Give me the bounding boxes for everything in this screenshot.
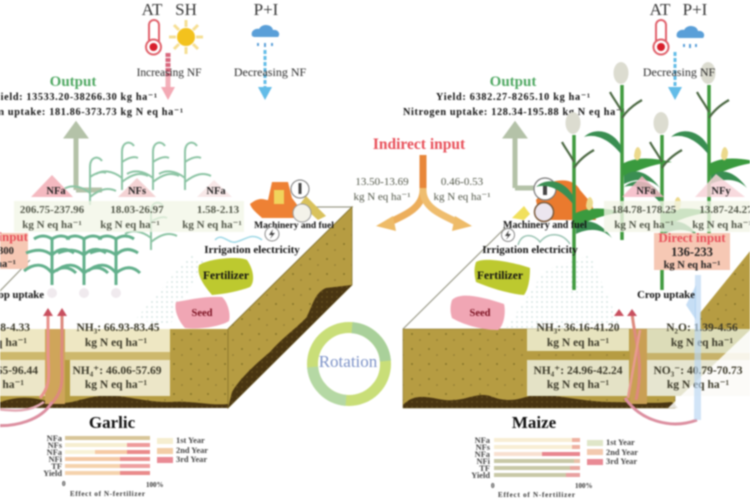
icon: gauge circle	[534, 202, 554, 222]
rotation symbol	[312, 328, 386, 400]
legend: 1st Year	[176, 436, 205, 445]
text: right irrigation: Irrigation electricity	[482, 244, 578, 256]
heading: output: Output	[490, 74, 536, 90]
text: NH3: NH₃: 36.16-41.20	[537, 322, 620, 334]
text: irrigation: Irrigation electricity	[204, 244, 300, 256]
icon: lightning	[265, 227, 279, 241]
icon: lightning	[502, 228, 514, 242]
row labels: TF	[479, 464, 490, 473]
cut-away	[668, 330, 750, 408]
icon: thermometer	[146, 20, 161, 54]
soil: front face	[403, 329, 675, 408]
legend: 2nd Year	[606, 448, 638, 457]
text: N2O: N₂O: 1.39-4.56	[666, 322, 738, 334]
value: NFa: 206.75-237.96	[20, 204, 85, 216]
value: NFa2: 1.58-2.13	[197, 204, 240, 216]
icon: sun	[169, 20, 203, 54]
panel: right direct input: 136-233	[671, 245, 713, 259]
emission panels	[527, 329, 750, 408]
text: increasing NF: Increasing NF	[137, 67, 201, 79]
panel: NH3	[65, 329, 170, 352]
label: AT: AT	[142, 0, 163, 19]
arrow: output	[507, 125, 538, 188]
soil: side face	[700, 245, 750, 372]
maize plants	[536, 62, 750, 290]
triangle: NFa2	[197, 180, 232, 197]
panel: right direct input	[654, 230, 730, 271]
wave	[518, 235, 570, 245]
text: NH3 unit: kg N eq ha⁻¹	[85, 337, 147, 349]
panel: NH4	[70, 360, 170, 396]
left gas emissions	[14, 175, 244, 232]
text: right unit: kg N eq ha⁻¹	[433, 191, 491, 203]
panel: N2O	[647, 329, 750, 353]
blob: seed	[175, 297, 230, 329]
unit: NFa: kg N eq ha⁻¹	[614, 219, 674, 231]
label: NFa: NFa	[46, 186, 66, 197]
heading: garlic: Garlic	[89, 413, 136, 432]
text: machinery: Machinery and fuel	[254, 221, 334, 231]
field top surface edge	[403, 228, 505, 329]
icon: thermo circle	[291, 180, 309, 198]
soil: side face	[228, 207, 352, 408]
icon: rain cloud	[252, 25, 279, 47]
blob: fertilizer	[474, 260, 530, 295]
right gas emissions	[604, 174, 750, 232]
blue flow band	[694, 275, 701, 420]
indirect input	[353, 136, 491, 231]
blob: seed: Seed	[192, 308, 213, 319]
strip	[647, 353, 750, 360]
text: NH4: NH₄⁺: 46.06-57.69	[72, 365, 162, 377]
right output	[403, 74, 625, 188]
unit: NFa2: kg N eq ha⁻¹	[182, 219, 242, 231]
value: NFs: 18.03-26.97	[110, 204, 164, 216]
row labels: NFi	[48, 455, 63, 464]
ring	[312, 328, 386, 400]
legend: 2nd Year	[176, 446, 208, 455]
arrow: increasing	[161, 53, 175, 100]
strip	[0, 352, 170, 360]
icon: thermometer	[654, 20, 668, 54]
column	[45, 329, 65, 404]
row labels: NFa	[47, 448, 63, 457]
axis	[62, 480, 164, 498]
row labels: NFa	[47, 434, 63, 443]
label: P+I: P+I	[254, 0, 279, 19]
row labels: TF	[51, 462, 62, 471]
row labels: NFa	[475, 436, 491, 445]
unit: NFy: kg N eq ha⁻¹	[692, 219, 750, 231]
axis: 100%	[575, 482, 592, 490]
label: NFa2: NFa	[206, 186, 226, 197]
arrows: soil emissions	[0, 308, 67, 426]
right field block	[403, 228, 750, 424]
emission panels	[0, 329, 170, 404]
field top surface	[0, 207, 352, 329]
icon: tractor	[512, 180, 596, 220]
text: NH4 unit: kg N eq ha⁻¹	[547, 379, 609, 391]
panel: N2O	[0, 329, 45, 352]
garlic plants: front row	[24, 203, 177, 298]
icon: rain cloud	[677, 26, 704, 48]
axis: 0	[62, 480, 66, 488]
text: yield: Yield: 6382.27-8265.10 kg ha⁻¹	[436, 92, 590, 103]
text: NO3: NO₃⁻: 40.79-70.73	[653, 365, 743, 377]
garlic plants: back row	[64, 143, 211, 205]
row labels: Yield	[43, 469, 62, 478]
value: NFa: 184.78-178.25	[612, 204, 677, 216]
legend: 3rd Year	[606, 457, 637, 466]
row labels	[471, 436, 491, 480]
axis: Effect of N-fertilizer	[498, 491, 575, 499]
text: NH3 unit: kg N eq ha⁻¹	[547, 337, 609, 349]
triangle: NFs	[118, 178, 156, 197]
unit: NFs: kg N eq ha⁻¹	[100, 219, 160, 231]
heading: output: Output	[50, 74, 96, 90]
label: SH: SH	[175, 0, 197, 19]
column	[630, 329, 647, 404]
blob: seed	[450, 296, 505, 330]
text: NH3: NH₃: 66.93-83.45	[77, 322, 160, 334]
label: P+I: P+I	[683, 0, 708, 19]
text: left unit: kg N eq ha⁻¹	[353, 191, 411, 203]
heading: maize: Maize	[512, 413, 557, 432]
text: decreasing NF: Decreasing NF	[234, 65, 306, 79]
row labels: NFa	[475, 450, 491, 459]
legend: 1st Year	[606, 438, 635, 447]
legend: 3rd Year	[176, 455, 207, 464]
heading: Indirect input	[373, 136, 466, 153]
soil: front face	[0, 329, 228, 408]
panel: right direct input: kg N eq ha⁻¹	[664, 260, 720, 271]
axis	[491, 482, 592, 499]
panel: NH4	[527, 360, 629, 396]
axis: 100%	[146, 481, 164, 489]
text: N2O unit: kg N eq ha⁻¹	[671, 337, 733, 349]
panel: right direct input: Direct input	[658, 230, 726, 245]
icon: thermo circle	[534, 178, 556, 200]
stipple: irrigation zone	[135, 255, 205, 325]
text: NH4: NH₄⁺: 24.96-42.24	[533, 365, 623, 377]
wave	[215, 237, 262, 242]
row labels: NFs	[476, 443, 491, 452]
panel: NO3	[0, 360, 45, 396]
legend	[157, 436, 208, 464]
blob: fertilizer: Fertilizer	[203, 270, 249, 282]
soil: dark layer front	[0, 396, 228, 408]
left machinery	[175, 180, 334, 329]
blob: fertilizer: Fertilizer	[477, 270, 523, 282]
label: NFs: NFs	[128, 186, 146, 197]
bars	[494, 438, 580, 477]
triangle: NFy	[695, 174, 745, 197]
arrow: output	[68, 125, 102, 190]
text: left value: 13.50-13.69	[355, 176, 409, 188]
label: AT: AT	[650, 0, 671, 19]
text: NH4 unit: kg N eq ha⁻¹	[85, 379, 147, 391]
text: NO3 unit: kg N eq ha⁻¹	[667, 379, 729, 391]
arrows: soil emissions	[614, 309, 697, 424]
blob: fertilizer	[198, 258, 253, 295]
axis: Effect of N-fertilizer	[70, 490, 145, 498]
chart: maize N-fertilizer effect	[471, 436, 638, 499]
chart: garlic N-fertilizer effect	[43, 434, 208, 498]
row labels	[43, 434, 63, 478]
text: right value: 0.46-0.53	[441, 176, 484, 188]
stipple	[505, 255, 620, 330]
text: right decreasing NF: Decreasing NF	[643, 65, 715, 79]
panel: left direct input	[0, 229, 29, 270]
triangle: NFa	[31, 175, 73, 197]
legend	[587, 438, 638, 466]
text: right crop uptake: Crop uptake	[637, 289, 695, 301]
label: NFa: NFa	[636, 186, 656, 197]
arrow: decreasing	[668, 52, 682, 100]
text: right machinery: Machinery and fuel	[503, 220, 587, 231]
unit: NFa: kg N eq ha⁻¹	[22, 219, 82, 231]
left climate drivers	[137, 0, 306, 100]
right climate drivers	[650, 0, 708, 100]
bars	[65, 436, 150, 475]
band	[14, 201, 244, 232]
axis: 0	[491, 482, 495, 490]
panel: NO3	[647, 360, 750, 396]
icon: tractor	[250, 182, 326, 220]
label: NFy: NFy	[711, 186, 731, 197]
text: rotation: Rotation	[319, 352, 378, 371]
row labels: Yield	[471, 471, 490, 480]
row labels: NFs	[48, 441, 63, 450]
band	[604, 201, 750, 232]
right machinery icons	[450, 178, 596, 330]
soil: dark layer side	[228, 285, 352, 408]
arrow: split	[376, 155, 472, 231]
blob: seed: Seed	[470, 308, 491, 319]
soil: dark layer	[403, 395, 678, 408]
arrow: decreasing	[258, 50, 272, 100]
left output	[0, 74, 183, 190]
panel: NH3	[527, 329, 629, 351]
left field block	[0, 207, 352, 426]
triangle: NFa	[622, 176, 664, 197]
row labels: NFi	[476, 457, 491, 466]
text: nitrogen uptake: Nitrogen uptake: 128.34-195.88 kg N eq ha⁻¹	[403, 107, 625, 118]
icon: gauge circle	[293, 204, 311, 222]
